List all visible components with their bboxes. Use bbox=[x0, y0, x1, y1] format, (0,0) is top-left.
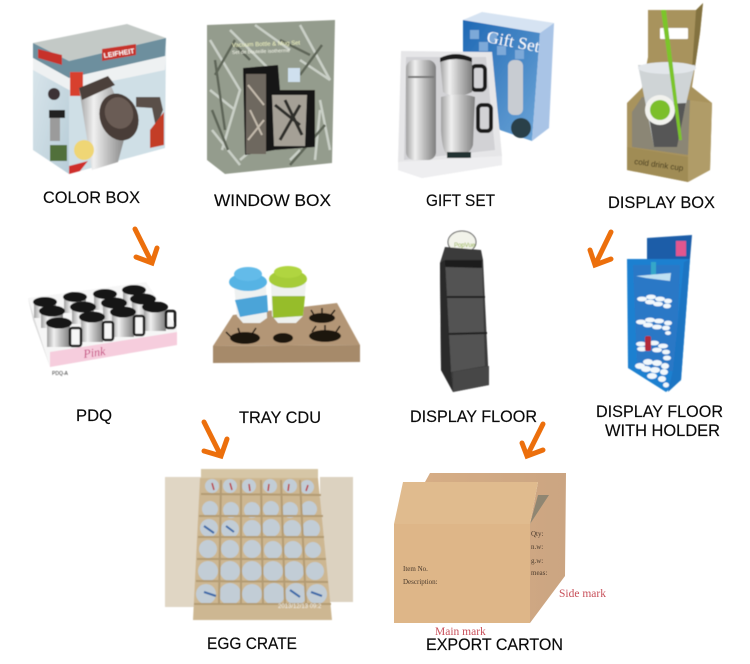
labels row 2: PDQ bbox=[76, 407, 112, 425]
labels row 2: DISPLAY FLOOR bbox=[596, 403, 723, 421]
product: PDQ bbox=[28, 282, 177, 377]
labels row 2: DISPLAY FLOOR bbox=[410, 408, 537, 426]
product: egg crate bbox=[165, 469, 353, 620]
product: window box: Set de bouteille isotherme bbox=[232, 48, 290, 56]
labels row 3 bbox=[207, 635, 563, 654]
product: export carton: Description: bbox=[403, 578, 438, 586]
arrow: to display floor with holder bbox=[590, 232, 611, 265]
heading labels row 1: DISPLAY BOX bbox=[608, 194, 715, 212]
product: display floor: PopVue bbox=[454, 243, 476, 249]
product: export carton: Main mark bbox=[435, 626, 486, 638]
product: display floor bbox=[440, 231, 489, 392]
labels row 2: TRAY CDU bbox=[239, 409, 321, 427]
product: export carton: meas: bbox=[531, 569, 547, 577]
product: display box bbox=[627, 3, 712, 182]
labels row 3: EXPORT CARTON bbox=[426, 636, 563, 654]
labels row 2: WITH HOLDER bbox=[605, 422, 720, 440]
product: window box bbox=[207, 20, 335, 174]
product: color box bbox=[33, 24, 166, 174]
heading labels row 1: GIFT SET bbox=[426, 192, 495, 210]
product: display box: cold drink cup bbox=[634, 157, 684, 173]
heading labels row 1: WINDOW BOX bbox=[214, 192, 331, 210]
product: PDQ: PDQ-A bbox=[52, 371, 68, 377]
arrow: color box to PDQ bbox=[135, 229, 157, 263]
product: export carton bbox=[394, 473, 606, 638]
product: display floor with holder bbox=[627, 235, 692, 392]
product: tray CDU bbox=[213, 266, 360, 363]
product: gift set bbox=[398, 12, 554, 178]
product: egg crate: 2013/12/13 09:2 bbox=[278, 604, 322, 610]
heading labels row 1: COLOR BOX bbox=[43, 189, 140, 207]
product: color box: LEIFHEIT bbox=[103, 48, 136, 60]
product: gift set: Gift Set bbox=[485, 27, 542, 56]
product: export carton: n.w: bbox=[531, 543, 543, 551]
product: PDQ: Pink bbox=[81, 344, 107, 361]
product: export carton: Item No. bbox=[403, 565, 428, 573]
product: export carton: g.w: bbox=[531, 557, 543, 565]
product: export carton: Qty: bbox=[531, 530, 544, 538]
labels row 2 bbox=[76, 403, 723, 440]
arrow: to export carton bbox=[522, 424, 543, 456]
product: window box: Vacuum Bottle & Mug Set bbox=[232, 41, 301, 49]
arrow: to egg crate bbox=[204, 422, 227, 456]
labels row 3: EGG CRATE bbox=[207, 635, 297, 653]
heading labels row 1 bbox=[43, 189, 715, 212]
product: export carton: Side mark bbox=[559, 588, 606, 600]
